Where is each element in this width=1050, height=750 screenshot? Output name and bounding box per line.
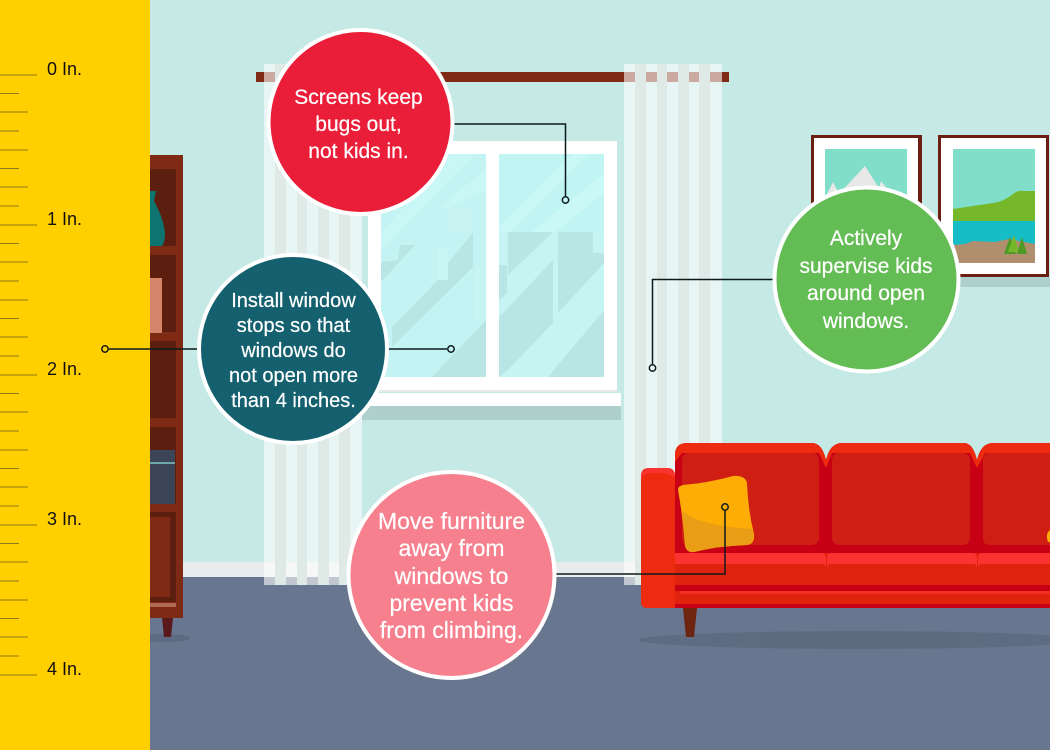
picture frame: mountains [811, 135, 922, 285]
callout: pink furniture: from climbing. [380, 617, 523, 643]
connector: teal callout to window [385, 346, 454, 352]
ruler labels [47, 59, 82, 679]
connector: red callout to window [450, 124, 569, 203]
ruler labels: 4 In. [47, 659, 82, 679]
connector: ruler to teal callout [102, 346, 200, 352]
callout: pink furniture: Move furniture [378, 508, 525, 534]
callout: teal window stops: not open more [229, 365, 358, 387]
callout: green supervise: Actively [830, 227, 903, 250]
callout: teal window stops [199, 255, 387, 443]
callout: pink furniture: away from [398, 535, 505, 561]
left curtain [264, 64, 362, 585]
callout: teal window stops: windows do [240, 340, 346, 362]
ruler labels: 0 In. [47, 59, 82, 79]
callout: green supervise: windows. [822, 310, 909, 333]
ruler major ticks [0, 75, 37, 675]
ruler labels: 2 In. [47, 359, 82, 379]
ruler labels: 3 In. [47, 509, 82, 529]
callout: red screens: bugs out, [315, 113, 402, 136]
sofa [638, 443, 1050, 649]
callout: green supervise [774, 188, 958, 372]
picture frame: landscape [938, 135, 1050, 287]
callout: red screens: not kids in. [308, 140, 409, 163]
wall background [0, 0, 1050, 577]
callout: red screens [268, 30, 452, 214]
yellow pillow [678, 476, 754, 552]
bookshelf [140, 155, 190, 642]
ruler labels: 1 In. [47, 209, 82, 229]
callout: teal window stops: stops so that [237, 315, 351, 337]
connector: green callout to curtain [649, 280, 776, 371]
callout: red screens: Screens keep [294, 86, 423, 109]
callout: teal window stops: than 4 inches. [231, 390, 356, 412]
callout: pink furniture: prevent kids [389, 590, 514, 616]
sofa seat [675, 553, 1050, 585]
sofa arm [641, 468, 675, 608]
callout: green supervise: around open [807, 282, 925, 305]
ruler tick marks [0, 94, 28, 656]
callout: pink furniture [348, 472, 554, 678]
callout: green supervise: supervise kids [799, 255, 933, 278]
callout: pink furniture: windows to [394, 563, 508, 589]
window [362, 141, 621, 420]
baseboard [150, 562, 1050, 577]
left glass pane [381, 154, 486, 377]
connector: pink callout to pillow [552, 504, 728, 574]
right glass pane [499, 154, 604, 377]
floor [150, 577, 1050, 750]
sofa back [675, 443, 1050, 570]
right curtain [624, 64, 722, 585]
curtain rod [256, 72, 729, 82]
callout: teal window stops: Install window [231, 290, 356, 312]
ruler [0, 0, 150, 750]
